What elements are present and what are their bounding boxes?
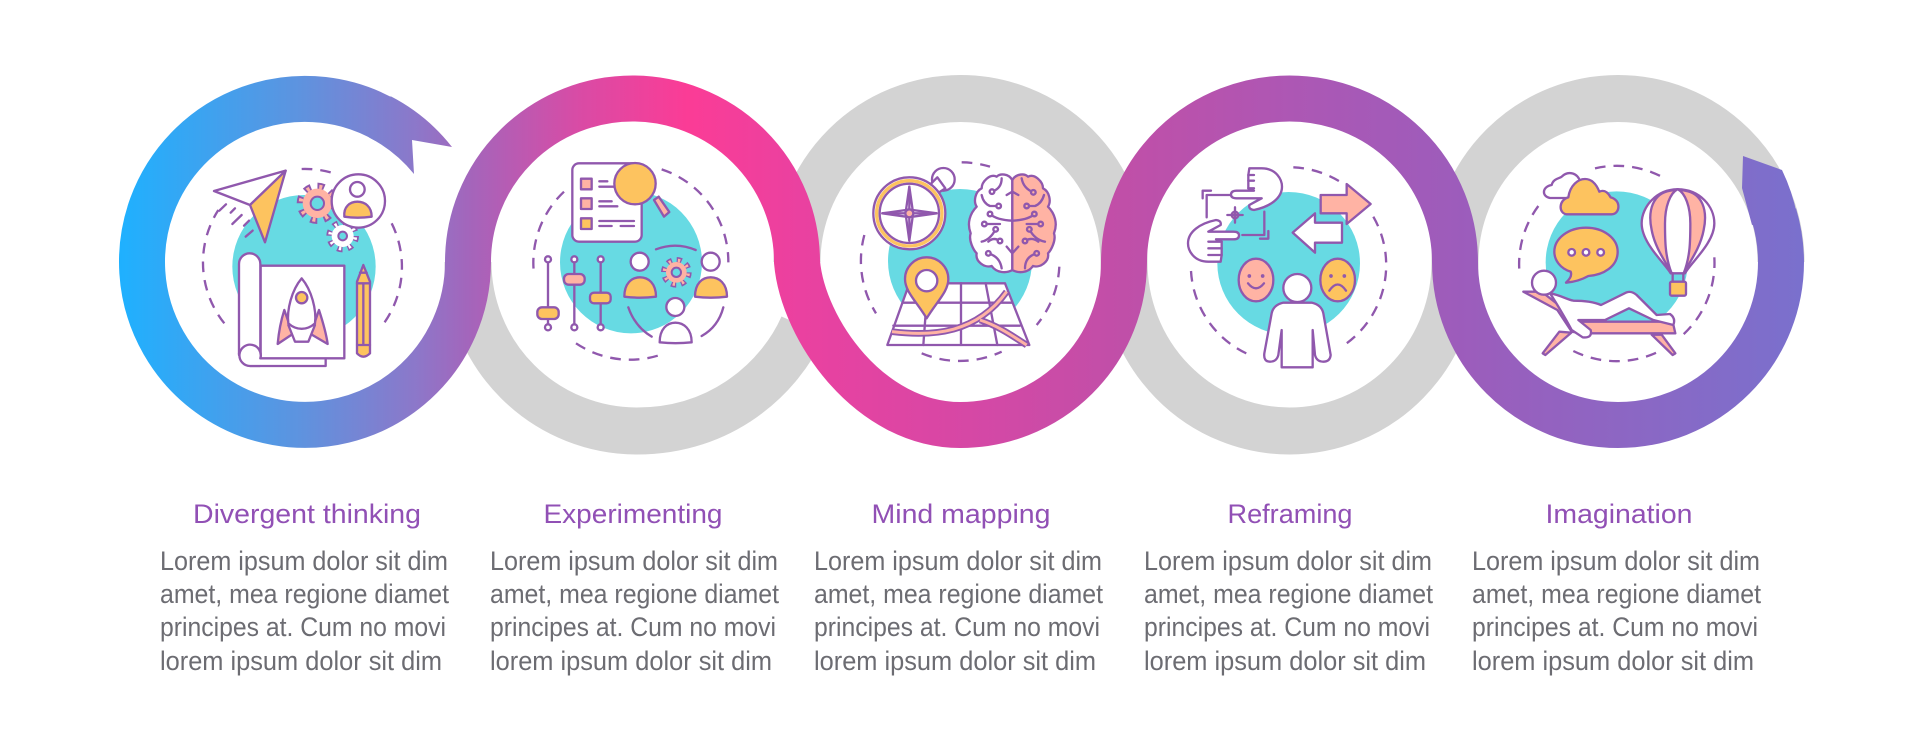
text: imagination: lorem ipsum dolor sit dim	[1472, 646, 1754, 676]
teal backdrop circle	[232, 195, 376, 338]
icon: divergent thinking	[203, 169, 402, 366]
teal backdrop circle	[1546, 191, 1688, 333]
paper plane	[214, 171, 286, 242]
text: reframing: amet, mea regione diamet	[1144, 579, 1434, 609]
large gear	[301, 187, 334, 220]
small gear	[330, 223, 355, 249]
text: mind mapping: principes at. Cum no movi	[814, 612, 1100, 642]
lounger with resting person	[1523, 271, 1675, 355]
text: mind mapping: lorem ipsum dolor sit dim	[814, 646, 1096, 676]
grey wave ribbon	[468, 99, 1781, 431]
text: reframing: lorem ipsum dolor sit dim	[1144, 646, 1426, 676]
text: imagination: Imagination	[1546, 499, 1692, 529]
sad face	[1320, 259, 1355, 301]
speech bubble	[1554, 228, 1618, 283]
text: divergent thinking: principes at. Cum no movi	[160, 612, 446, 642]
text: reframing: Reframing	[1228, 499, 1352, 529]
text: imagination: amet, mea regione diamet	[1472, 579, 1762, 609]
text: reframing: Lorem ipsum dolor sit dim	[1144, 546, 1432, 576]
teal backdrop circle	[888, 189, 1032, 333]
text: experimenting: Experimenting	[544, 499, 722, 529]
text: divergent thinking: Divergent thinking	[193, 499, 421, 529]
brain	[969, 174, 1056, 272]
text: imagination: Lorem ipsum dolor sit dim	[1472, 546, 1760, 576]
dashed orbit	[533, 169, 728, 360]
icon: experimenting	[533, 163, 728, 360]
text: divergent thinking: amet, mea regione diamet	[160, 579, 450, 609]
sliders	[537, 256, 611, 330]
exchange arrows	[1293, 184, 1371, 253]
icon: reframing	[1188, 167, 1386, 367]
teal backdrop circle	[1217, 192, 1360, 335]
location pin	[905, 257, 948, 318]
blueprint scroll with rocket	[239, 253, 344, 366]
clouds	[1544, 173, 1618, 214]
pencil	[357, 265, 370, 357]
person	[1264, 274, 1331, 367]
text: experimenting	[490, 499, 780, 676]
text: imagination: principes at. Cum no movi	[1472, 612, 1758, 642]
street map	[887, 283, 1029, 345]
text: reframing: principes at. Cum no movi	[1144, 612, 1430, 642]
text: experimenting: lorem ipsum dolor sit dim	[490, 646, 772, 676]
dashed orbit	[1191, 167, 1386, 354]
dashed orbit	[203, 169, 402, 325]
framing hands	[1188, 168, 1282, 262]
smiling face	[1239, 259, 1273, 301]
text: reframing	[1144, 499, 1434, 676]
dashed orbit	[861, 162, 1059, 361]
text: mind mapping: amet, mea regione diamet	[814, 579, 1104, 609]
person badge	[332, 174, 385, 228]
text: divergent thinking: lorem ipsum dolor sit dim	[160, 646, 442, 676]
text: experimenting: principes at. Cum no movi	[490, 612, 776, 642]
compass	[873, 168, 955, 249]
text: mind mapping: Mind mapping	[872, 499, 1050, 529]
text: divergent thinking	[160, 499, 450, 676]
icon: imagination	[1519, 166, 1715, 361]
icon: mind mapping	[861, 162, 1059, 361]
gear	[664, 260, 688, 284]
gradient wave ribbon with arrow ends	[142, 96, 1797, 425]
text: mind mapping: Lorem ipsum dolor sit dim	[814, 546, 1102, 576]
hot air balloon	[1642, 189, 1714, 296]
checklist with magnifier	[572, 163, 669, 242]
text: mind mapping	[814, 499, 1104, 676]
text: imagination	[1472, 499, 1762, 676]
team of three	[624, 246, 727, 343]
text: divergent thinking: Lorem ipsum dolor sit dim	[160, 546, 448, 576]
text: experimenting: Lorem ipsum dolor sit dim	[490, 546, 778, 576]
text: experimenting: amet, mea regione diamet	[490, 579, 780, 609]
dashed orbit	[1519, 166, 1715, 361]
teal backdrop circle	[560, 191, 702, 333]
